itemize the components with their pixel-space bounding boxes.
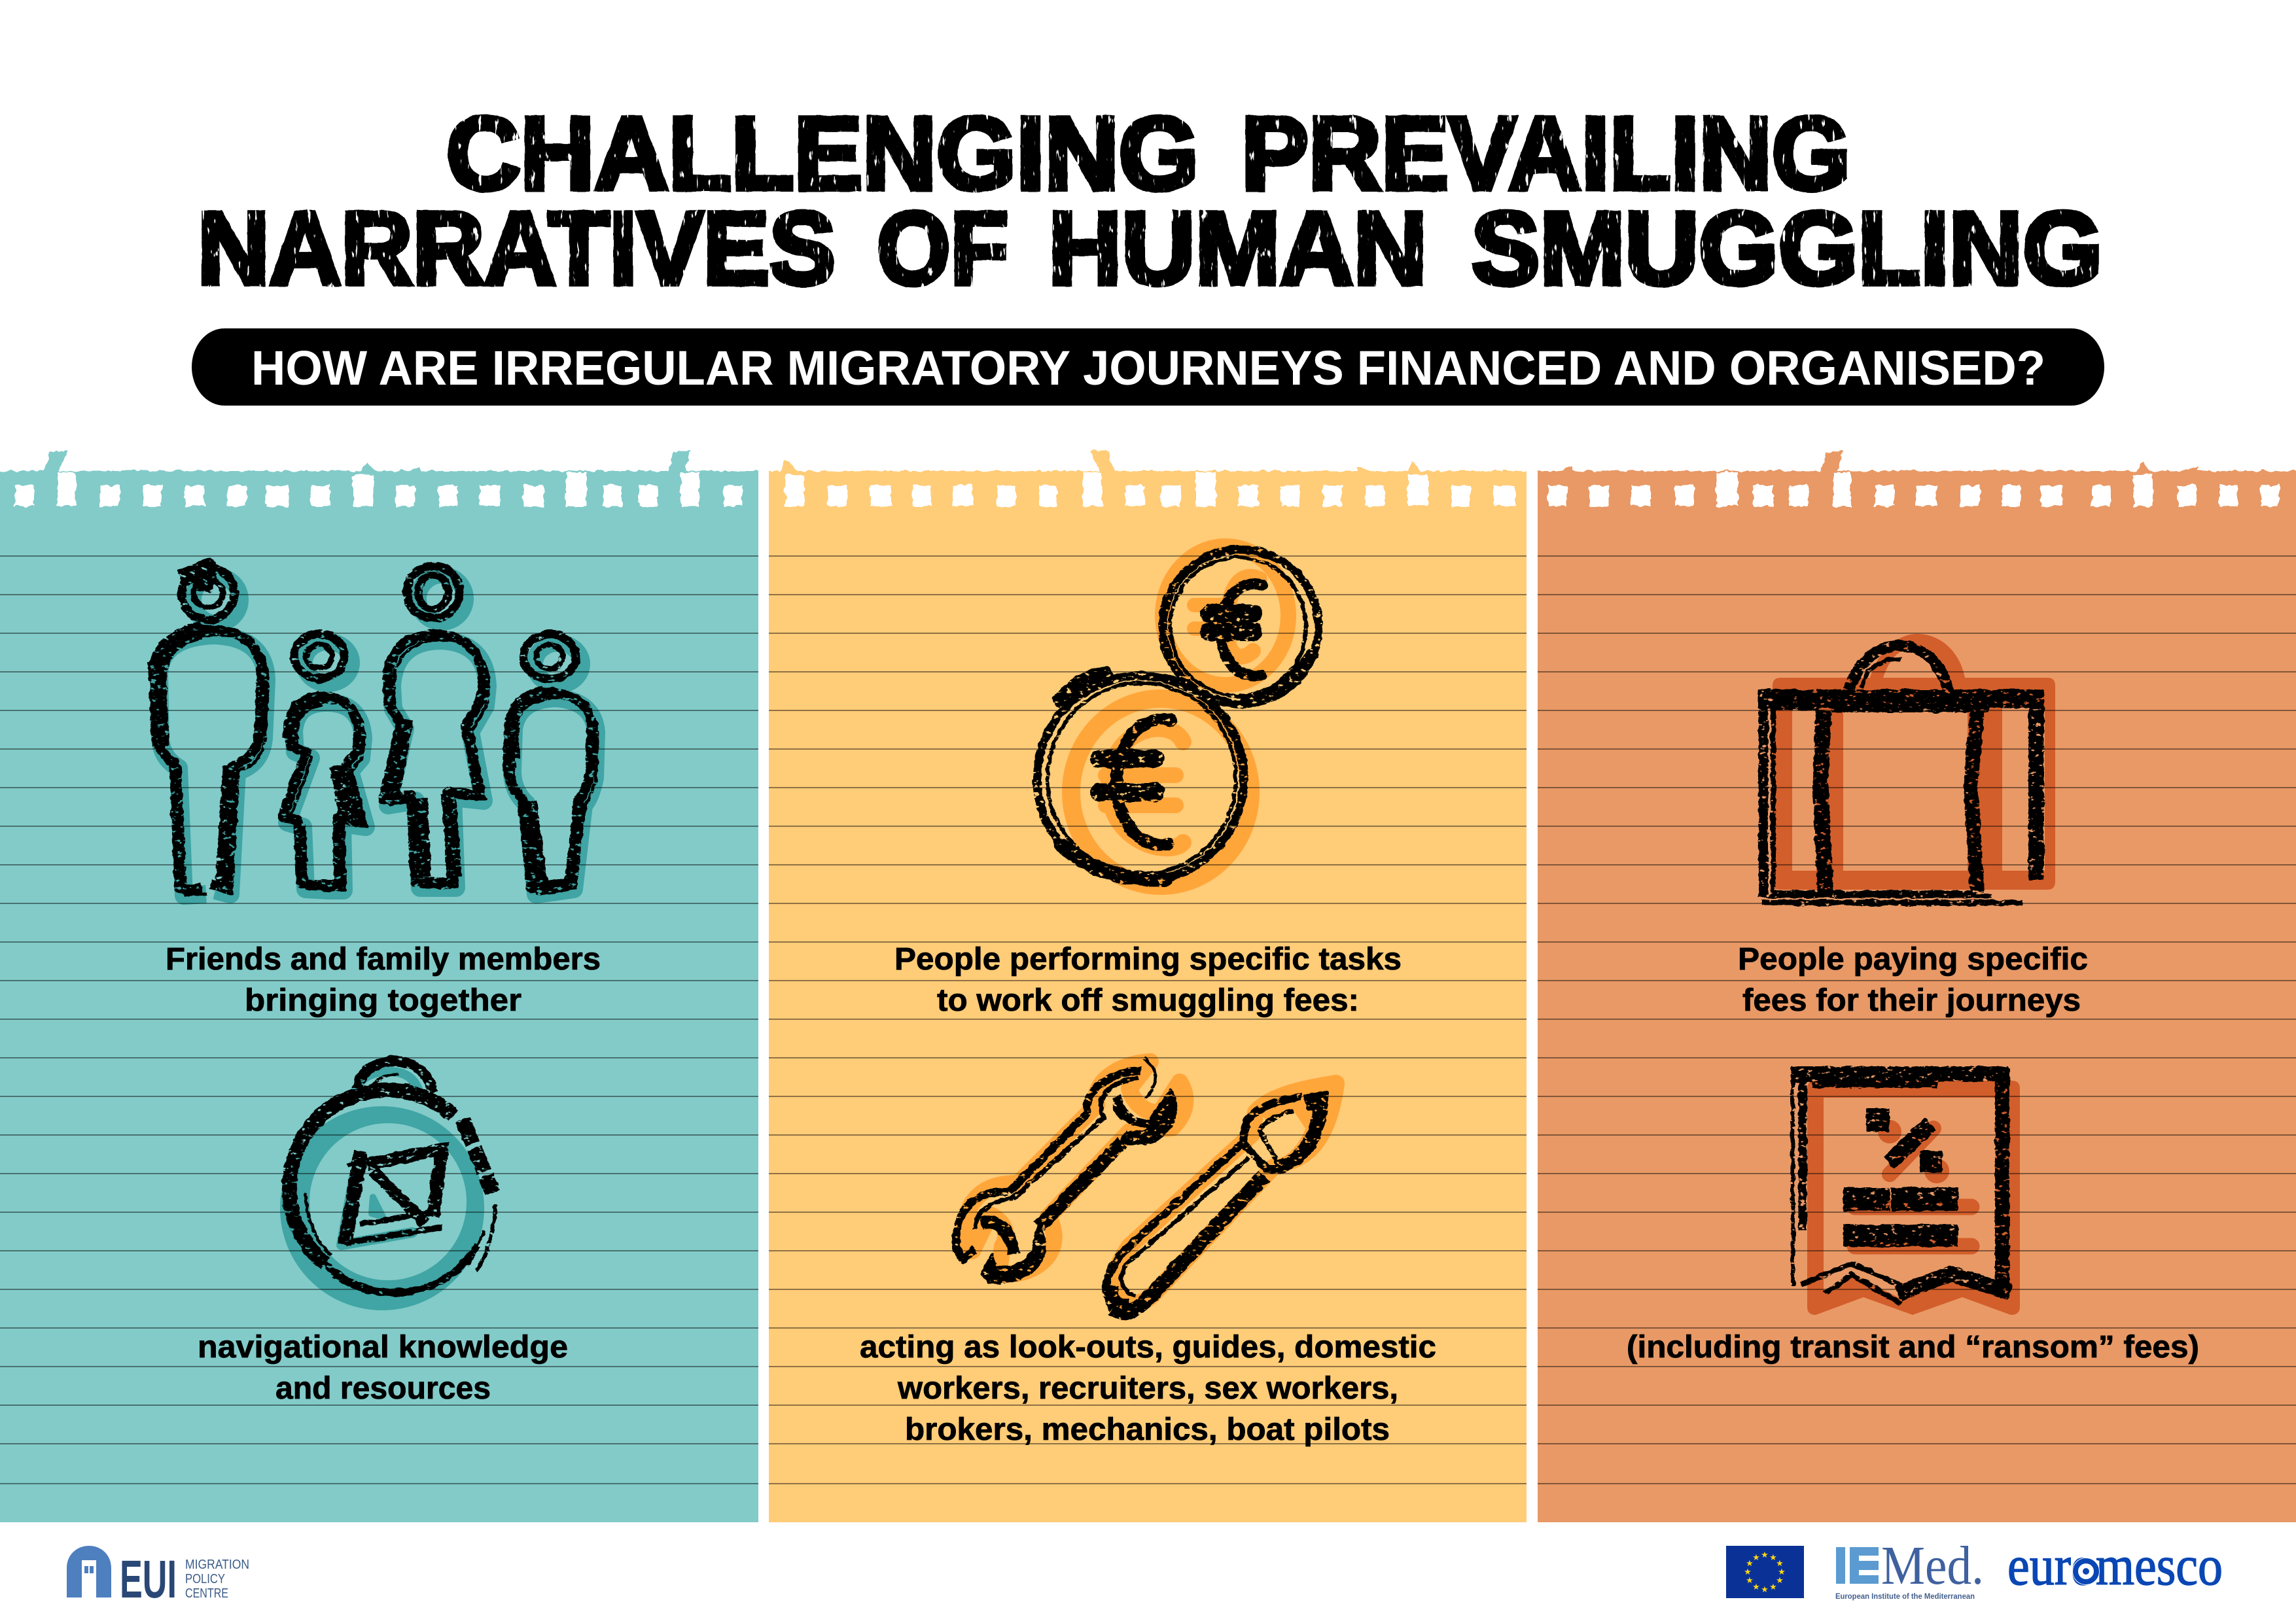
logo: EU flag: ★ [1752,1582,1760,1592]
torn paper tabs [769,449,1527,473]
text: people paying: People paying specific [1738,942,2088,977]
logo: EU flag: ★ [1776,1559,1784,1569]
icon shadow [159,575,596,896]
coins shadow [1071,546,1288,886]
ruled lines [769,556,1527,1484]
logo: EUI Migration Policy Centre: POLICY [185,1572,225,1586]
punched holes [1548,472,2280,506]
suitcase shadow [1773,634,2055,890]
logo: EUI Migration Policy Centre: EUI [120,1550,177,1609]
logo: IEMed: Med. [1881,1535,1984,1596]
icon: receipt with percent [1792,1068,2020,1315]
icon: family of four [154,566,597,896]
text: bringing together: bringing together [245,983,521,1018]
logo: EU flag: ★ [1746,1576,1754,1586]
receipt ink [1792,1068,2010,1304]
logo: euromesco: euromesco [2007,1534,2223,1597]
suitcase ink [1758,646,2043,903]
logo: EU flag: ★ [1776,1576,1784,1586]
text: look-outs: acting as look-outs, guides, domestic [860,1330,1436,1365]
percent and bars shadow [1855,1120,1971,1246]
text: fees for journeys: fees for their journeys [1742,983,2081,1018]
logo: EU flag: ★ [1769,1553,1777,1563]
icon: wrench and brush [956,1058,1341,1312]
punched holes [15,472,742,506]
logo: EU flag: ★ [1778,1567,1786,1577]
coins ink [1037,550,1318,881]
title: OF [877,191,1008,306]
icon ink [154,566,597,895]
logo: EU flag: ★ [1744,1567,1752,1577]
logo: EU flag: ★ [1761,1585,1769,1595]
logo: EUI Migration Policy Centre: CENTRE [185,1586,228,1601]
subtitle pill: HOW ARE IRREGULAR MIGRATORY JOURNEYS FINANCED AND ORGANISED? [251,341,2045,395]
logo: EU flag: ★ [1752,1553,1760,1563]
text: including fees: (including transit and “ransom” fees) [1627,1330,2199,1365]
logo: EUI Migration Policy Centre [67,1546,249,1609]
logo: IEMed [1835,1535,1984,1601]
brush tip shadow [1260,1077,1341,1155]
logo arch [67,1546,111,1597]
title: CHALLENGING [446,96,1199,211]
panel: friends and family [0,450,771,1522]
compass handle and needle shadow [342,1072,419,1245]
icon: euro coins [1037,546,1318,886]
brush head bg [1260,1111,1305,1159]
logo: EUI Migration Policy Centre: MIGRATION [185,1558,249,1572]
logo: EU flag: ★ [1769,1582,1777,1592]
punched holes [785,472,1515,506]
tools ink [956,1058,1327,1312]
compass shadow [280,1106,484,1310]
text: work off fees: to work off smuggling fees: [937,983,1359,1018]
panel: paying fees [1531,450,2296,1522]
title [198,96,2102,306]
text: friends and family: Friends and family members [166,942,601,977]
torn paper tabs [0,450,758,473]
tools shadow [964,1062,1336,1304]
logo: IEMed: European Institute of the Mediterranean [1835,1592,1975,1601]
text: navigational knowledge: navigational knowledge [198,1330,568,1365]
torn paper tabs [1538,450,2296,473]
receipt shadow [1807,1081,2020,1315]
title: PREVAILING [1241,96,1850,211]
subtitle pill [192,328,2104,406]
logo: EU flag [1726,1546,1804,1598]
title: HUMAN [1048,191,1427,306]
title: SMUGGLING [1472,191,2102,306]
logo: EU flag: ★ [1746,1559,1754,1569]
text: people performing tasks: People performing specific tasks [894,942,1402,977]
ruled lines [0,556,758,1484]
icon: compass [280,1061,496,1310]
panel: specific tasks [762,450,1533,1522]
title: NARRATIVES [198,191,836,306]
text: and resources: and resources [275,1371,491,1406]
text: brokers: brokers, mechanics, boat pilots [905,1412,1390,1447]
compass ink [289,1061,496,1295]
logo: EU flag: ★ [1761,1550,1769,1560]
ruled lines [1538,556,2296,1484]
icon: suitcase [1758,634,2055,903]
text: workers: workers, recruiters, sex workers, [897,1371,1398,1406]
